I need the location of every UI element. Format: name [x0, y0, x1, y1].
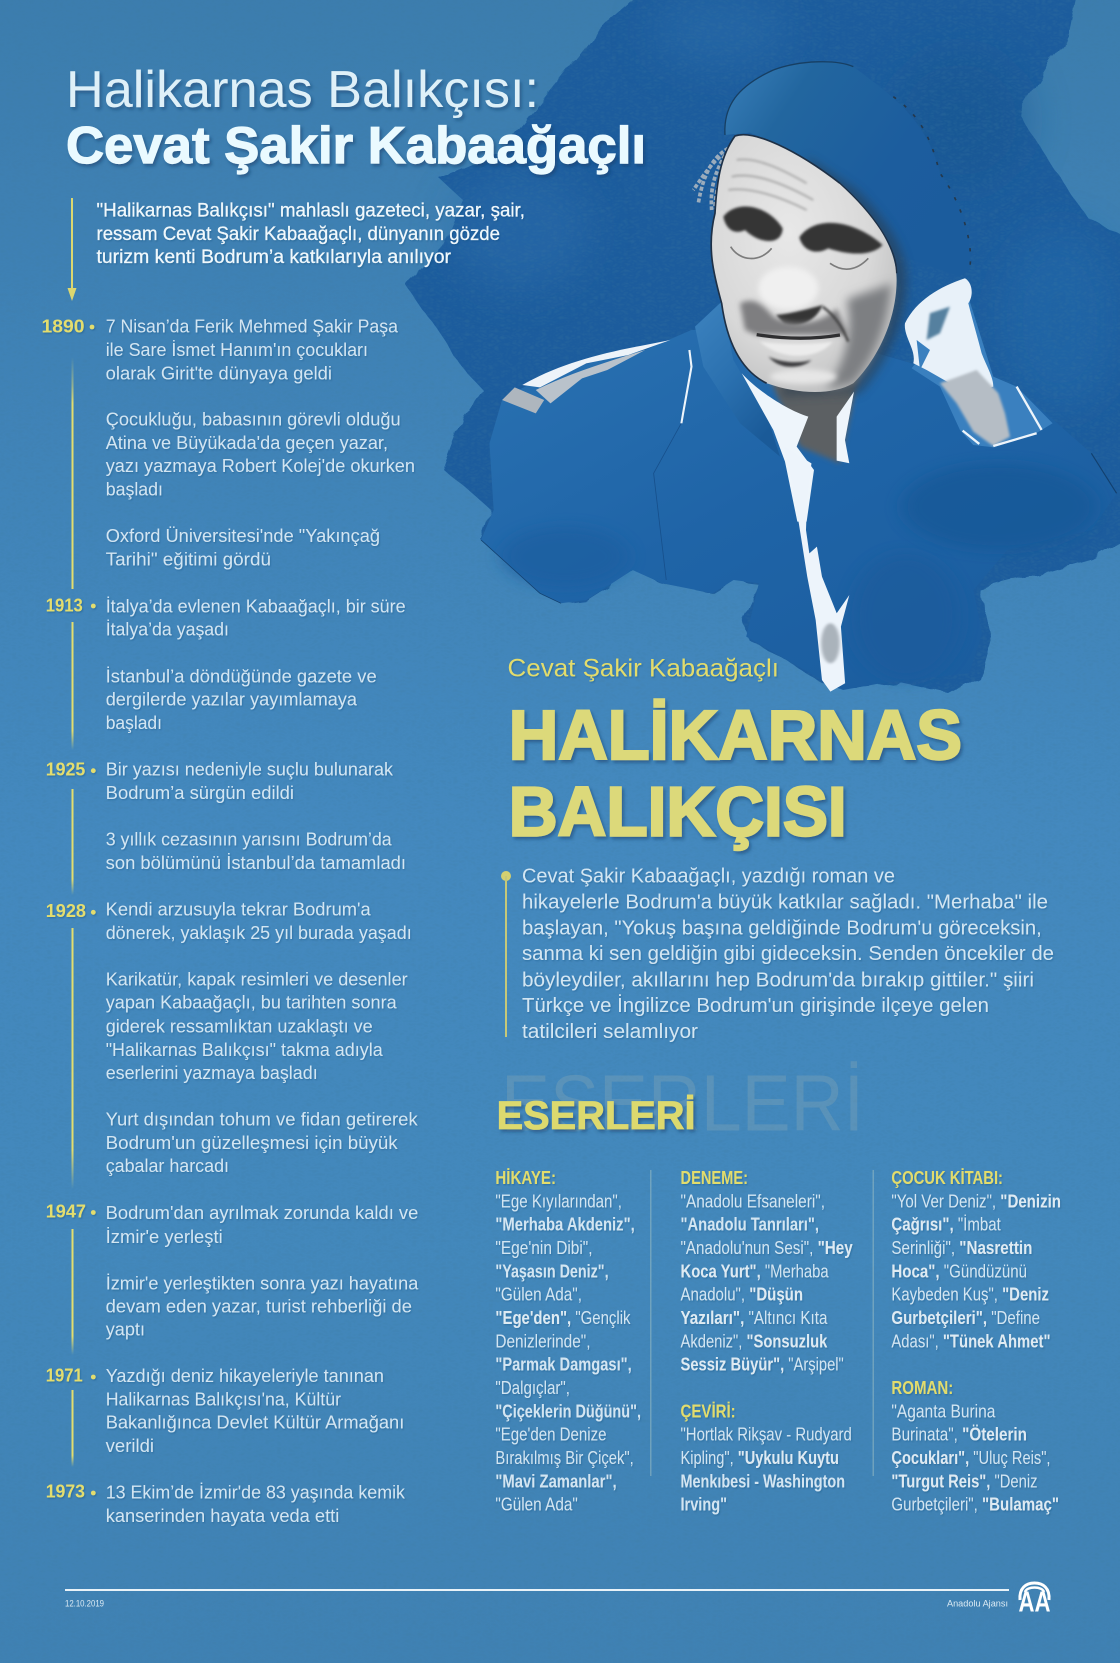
column: Hikaye: "Mavi Zamanlar",: [495, 1471, 617, 1491]
timeline years: 1913: [46, 595, 83, 616]
column: Deneme and Çeviri: "Hortlak Rikşav - Rudyard: [680, 1425, 852, 1445]
column: Deneme and Çeviri: Yazıları", "Altıncı Kıta: [680, 1308, 828, 1328]
hair: [693, 148, 728, 210]
timeline text: yapan Kabaağaçlı, bu tarihten sonra: [106, 992, 398, 1013]
timeline text: eserlerini yazmaya başladı: [106, 1062, 318, 1083]
timeline text: Bakanlığınca Devlet Kültür Armağanı: [106, 1412, 404, 1433]
column: Çocuk Kitabı and Roman: Çocukları", "Uluç Reis",: [891, 1448, 1050, 1468]
timeline text: yaptı: [106, 1319, 145, 1340]
timeline years: 1947: [46, 1200, 86, 1221]
timeline text: Yurt dışından tohum ve fidan getirerek: [106, 1109, 419, 1130]
hat: [725, 62, 970, 277]
column: Deneme and Çeviri: Kipling", "Uykulu Kuytu: [680, 1448, 839, 1468]
neck: [770, 367, 860, 463]
description paragraph: hikayelerle Bodrum'a büyük katkılar sağladı. "Merhaba" ile: [522, 892, 1048, 914]
column: Hikaye: "Merhaba Akdeniz",: [495, 1215, 635, 1235]
works heading: ESERLERİ: [497, 1094, 696, 1138]
column: Hikaye: Denizlerinde",: [495, 1331, 590, 1351]
eye bags: [731, 247, 868, 269]
icon: Anadolu Agency logo: AA: [1018, 1586, 1051, 1618]
column: Hikaye: "Dalgıçlar",: [495, 1378, 570, 1398]
timeline text: kanserinden hayata veda etti: [106, 1505, 339, 1526]
timeline years: [42, 316, 96, 1502]
timeline text: Bodrum’a sürgün edildi: [106, 782, 294, 803]
timeline text: çabalar harcadı: [106, 1155, 229, 1176]
description paragraph: başlayan, "Yokuş başına geldiğinde Bodrum'u göreceksin,: [522, 918, 1042, 940]
hand: [905, 278, 1042, 446]
timeline text: Bodrum'un güzelleşmesi için büyük: [106, 1132, 399, 1153]
footer agency name: Anadolu Ajansı: [947, 1599, 1008, 1610]
shirt collar: [742, 373, 854, 522]
bullet line: [501, 871, 511, 1037]
timeline years: 1928: [46, 900, 86, 921]
description paragraph: sanma ki sen geldiğin gibi gideceksin. Senden öncekiler de: [522, 943, 1054, 965]
intro text: ressam Cevat Şakir Kabaağaçlı, dünyanın gözde: [96, 224, 500, 245]
timeline text: Oxford Üniversitesi'nde "Yakınçağ: [106, 525, 380, 546]
arm cuff: [912, 297, 1053, 447]
column: Deneme and Çeviri: Akdeniz", "Sonsuzluk: [680, 1331, 828, 1351]
description paragraph: tatilcileri selamlıyor: [522, 1021, 698, 1043]
column: Hikaye: "Çiçeklerin Düğünü",: [495, 1401, 641, 1421]
timeline text: İstanbul’a döndüğünde gazete ve: [106, 665, 377, 686]
column: Hikaye: "Gülen Ada",: [495, 1285, 582, 1305]
timeline text: "Halikarnas Balıkçısı" takma adıyla: [106, 1039, 384, 1060]
column: Çocuk Kitabı and Roman: "Yol Ver Deniz", "Denizin: [891, 1191, 1061, 1211]
column: Deneme and Çeviri: [680, 1167, 853, 1515]
title: Cevat Şakir Kabaağaçlı: [66, 117, 646, 175]
intro text: "Halikarnas Balıkçısı" mahlaslı gazeteci, yazar, şair,: [96, 200, 525, 222]
mouth: [757, 335, 840, 338]
column: Çocuk Kitabı and Roman: Çağrısı", "İmbat: [891, 1215, 1001, 1235]
timeline text: Kendi arzusuyla tekrar Bodrum'a: [106, 899, 372, 920]
portrait illustration: [481, 62, 1117, 692]
column: Hikaye: "Ege'nin Dibi",: [495, 1238, 593, 1258]
column: Hikaye: Bırakılmış Bir Çiçek",: [495, 1448, 634, 1468]
timeline years: 1925: [46, 759, 85, 780]
timeline text: Halikarnas Balıkçısı'na, Kültür: [106, 1389, 341, 1410]
column: Hikaye: "Parmak Damgası",: [495, 1355, 632, 1375]
face base: [711, 135, 897, 392]
shoulder highlight: [502, 340, 691, 423]
column: Çocuk Kitabı and Roman: Hoca", "Gündüzünü: [891, 1261, 1027, 1281]
eye sockets: [723, 207, 883, 254]
forehead wrinkles: [728, 159, 813, 210]
timeline text: başladı: [106, 479, 163, 500]
section heading: BALIKÇISI: [509, 773, 847, 851]
column: Hikaye: "Gülen Ada": [495, 1495, 578, 1515]
dark watercolor blob behind portrait: [407, 0, 1120, 693]
shirt strip: [784, 447, 849, 692]
column: Hikaye: "Ege Kıyılarından",: [495, 1191, 622, 1211]
column: Deneme and Çeviri: Sessiz Büyür", "Arşipel": [680, 1355, 844, 1375]
section heading: HALİKARNAS: [509, 696, 962, 774]
upper lip shade: [740, 301, 848, 335]
timeline text: başladı: [106, 712, 162, 733]
column: Hikaye: "Yaşasın Deniz",: [495, 1261, 609, 1281]
timeline text: devam eden yazar, turist rehberliği de: [106, 1295, 412, 1316]
column: Deneme and Çeviri: Anadolu", "Düşün: [680, 1285, 803, 1305]
column: Deneme and Çeviri: "Anadolu Efsaneleri",: [680, 1191, 825, 1211]
timeline text: Tarihi" eğitimi gördü: [106, 549, 271, 570]
column: Çocuk Kitabı and Roman: "Turgut Reis", "Deniz: [891, 1471, 1038, 1491]
column: Çocuk Kitabı and Roman: "Aganta Burina: [891, 1401, 996, 1421]
timeline text: verildi: [106, 1435, 154, 1456]
column: Deneme and Çeviri: Koca Yurt", "Merhaba: [680, 1261, 830, 1281]
timeline text: Karikatür, kapak resimleri ve desenler: [106, 969, 408, 990]
timeline text: İtalya’da yaşadı: [106, 619, 229, 640]
intro text: turizm kenti Bodrum’a katkılarıyla anılıyor: [96, 247, 452, 268]
column: Çocuk Kitabı and Roman: [891, 1167, 1061, 1515]
timeline text: Çocukluğu, babasının görevli olduğu: [106, 408, 401, 429]
timeline text: 3 yıllık cezasının yarısını Bodrum’da: [106, 829, 392, 850]
column: Hikaye: HİKAYE:: [495, 1167, 556, 1188]
nose: [758, 267, 818, 310]
column: Çocuk Kitabı and Roman: ÇOCUK KİTABI:: [891, 1167, 1003, 1188]
column: Çocuk Kitabı and Roman: Adası", "Tünek Ahmet": [891, 1331, 1050, 1351]
column: Çocuk Kitabı and Roman: Gurbetçileri", "Bulamaç": [891, 1495, 1059, 1515]
timeline text: Yazdığı deniz hikayeleriyle tanınan: [106, 1365, 384, 1386]
coat: [481, 330, 1117, 690]
timeline text: Bir yazısı nedeniyle suçlu bulunarak: [106, 759, 394, 780]
title: [66, 61, 646, 175]
column: Çocuk Kitabı and Roman: Kaybeden Kuş", "Deniz: [891, 1285, 1049, 1305]
column: Çocuk Kitabı and Roman: Gurbetçileri", "Define: [891, 1308, 1040, 1328]
column: Deneme and Çeviri: DENEME:: [680, 1167, 748, 1188]
timeline rules: [72, 357, 74, 1467]
section subtitle: Cevat Şakir Kabaağaçlı: [508, 655, 779, 683]
section heading: [509, 696, 962, 851]
timeline text: ile Sare İsmet Hanım'ın çocukları: [106, 339, 368, 360]
column dividers: [650, 1170, 874, 1476]
timeline text: son bölümünü İstanbul’da tamamladı: [106, 852, 406, 873]
column: Deneme and Çeviri: Irving": [680, 1495, 727, 1515]
coat darker folds: [481, 420, 1117, 680]
timeline text: dergilerde yazılar yayımlamaya: [106, 689, 358, 710]
timeline text: Atina ve Büyükada'da geçen yazar,: [106, 432, 388, 453]
face: [711, 135, 907, 397]
timeline text: Bodrum'dan ayrılmak zorunda kaldı ve: [106, 1202, 418, 1223]
timeline years: 1890: [42, 316, 84, 336]
timeline text: İzmir'e yerleştikten sonra yazı hayatına: [106, 1272, 419, 1293]
timeline text: dönerek, yaklaşık 25 yıl burada yaşadı: [106, 922, 412, 943]
intro text: [96, 200, 525, 268]
timeline text: giderek ressamlıktan uzaklaştı ve: [106, 1015, 373, 1036]
right cheek shade: [827, 283, 892, 390]
lapel collar: [695, 302, 780, 457]
column: Deneme and Çeviri: ÇEVİRİ:: [680, 1400, 736, 1421]
footer date: 12.10.2019: [65, 1599, 104, 1610]
timeline text: olarak Girit'te dünyaya geldi: [106, 362, 332, 384]
timeline text: 13 Ekim’de İzmir'de 83 yaşında kemik: [106, 1482, 406, 1503]
works heading ghost: ESERLERİ: [501, 1059, 864, 1148]
intro arrow: [68, 198, 76, 301]
column: Deneme and Çeviri: "Anadolu'nun Sesi", "Hey: [680, 1238, 853, 1258]
column: Hikaye: [495, 1167, 641, 1515]
description paragraph: Cevat Şakir Kabaağaçlı, yazdığı roman ve: [522, 866, 895, 888]
timeline years: 1973: [46, 1481, 85, 1502]
timeline text: [106, 316, 419, 1526]
footer rule: [65, 1589, 1009, 1591]
description paragraph: böyleydiler, akıllarını hep Bodrum'da bırakıp gittiler." şiiri: [522, 970, 1034, 992]
face outline: [711, 135, 840, 383]
column: Deneme and Çeviri: "Anadolu Tanrıları",: [680, 1215, 819, 1235]
title: Halikarnas Balıkçısı:: [66, 61, 539, 119]
timeline years: 1971: [46, 1364, 83, 1386]
column: Hikaye: "Ege'den", "Gençlik: [495, 1308, 631, 1328]
timeline text: İtalya’da evlenen Kabaağaçlı, bir süre: [106, 595, 406, 616]
timeline text: 7 Nisan’da Ferik Mehmed Şakir Paşa: [106, 316, 399, 337]
column: Deneme and Çeviri: Menkıbesi - Washington: [680, 1471, 845, 1491]
column: Hikaye: "Ege'den Denize: [495, 1425, 606, 1445]
chin: [770, 369, 837, 384]
column: Çocuk Kitabı and Roman: ROMAN:: [891, 1377, 953, 1398]
description paragraph: Türkçe ve İngilizce Bodrum'un girişinde ilçeye gelen: [522, 994, 989, 1017]
description paragraph: [522, 866, 1054, 1043]
timeline text: İzmir'e yerleşti: [106, 1226, 223, 1247]
column: Çocuk Kitabı and Roman: Serinliği", "Nasrettin: [891, 1238, 1032, 1258]
timeline text: yazı yazmaya Robert Kolej'de okurken: [106, 455, 415, 476]
face halo: [780, 157, 907, 397]
column: Çocuk Kitabı and Roman: Burinata", "Ötelerin: [891, 1425, 1027, 1445]
